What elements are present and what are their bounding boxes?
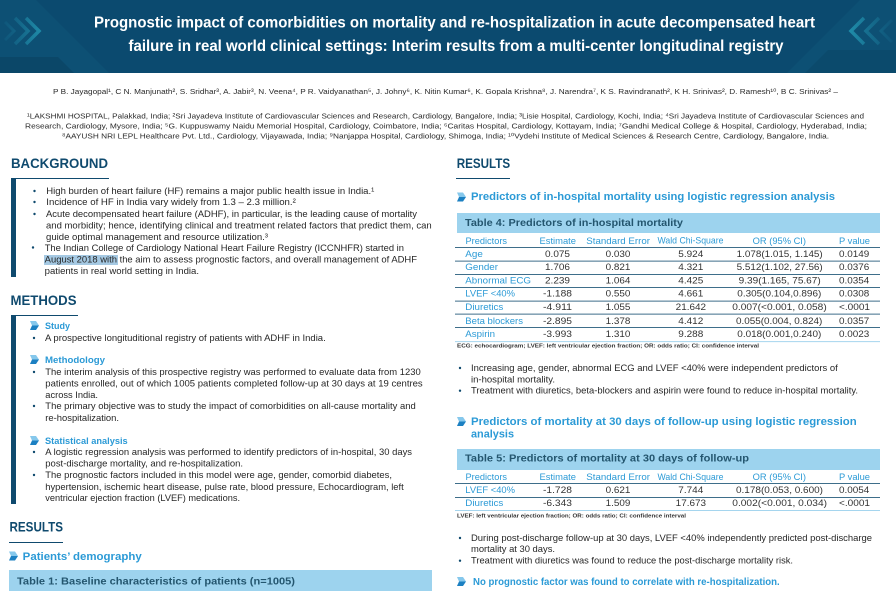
table 5: -6.343 <box>543 497 572 508</box>
authors: P B. Jayagopal¹, C N. Manjunath², S. Sridhar³, A. Jabir³, N. Veena⁴, P R. Vaidyanathan⁵, J. Johny⁶, K. Nitin Kumar⁶, K. Gopala Krishna⁸, J. Narendra⁷, K S. Ravindranath², K H. Srinivas², D. Ramesh¹⁰, B C. Srinivas² – <box>53 87 839 96</box>
table 4: 1.706 <box>545 261 570 272</box>
methodology text: The interim analysis of this prospective registry was performed to evaluate data from 1230 <box>45 366 421 377</box>
table 4: Beta blockers <box>465 316 523 326</box>
table 5: Table 5: Predictors of mortality at 30 days of follow-up <box>465 453 749 465</box>
icon: methodology arrow <box>30 355 39 364</box>
subheading: methodology: Methodology <box>45 355 106 366</box>
background bullets: High burden of heart failure (HF) remains a major public health issue in India.¹ <box>46 185 374 196</box>
panel: background <box>11 155 432 277</box>
table 4: 2.239 <box>545 275 570 286</box>
table 4: 0.0023 <box>839 328 869 339</box>
statistical analysis text: ventricular ejection fraction (LVEF) medications. <box>45 492 240 503</box>
background bullets: The Indian College of Cardiology National Heart Failure Registry (ICCNHFR) started in <box>45 242 404 253</box>
table 5: LVEF <40% <box>465 485 515 495</box>
icon: statistical analysis arrow <box>30 436 39 445</box>
table 4: 0.0357 <box>839 315 869 326</box>
highlight <box>44 255 118 265</box>
table 4: Diuretics <box>465 302 504 312</box>
table 5: <.0001 <box>839 497 870 508</box>
table 5: 0.002(<0.001, 0.034) <box>732 497 827 508</box>
subheading: study: Study <box>45 321 71 332</box>
table 4: 4.425 <box>678 275 703 286</box>
table 4: -2.895 <box>543 315 572 326</box>
affiliations: Research, Cardiology, Mysore, India; ⁵G. Kuppuswamy Naidu Memorial Hospital, Cardiology, Coimbatore, India; ⁶Caritas Hospital, Cardiology, Kottayam, India; ⁷Gandhi Medical College & Hospital, Cardiology, Hyderabad, India; <box>25 122 867 130</box>
table 4: 5.924 <box>678 248 703 259</box>
table 5 findings <box>459 532 872 566</box>
title: failure in real world clinical settings: Interim results from a multi-center longitudinal registry <box>128 38 784 55</box>
table 5: -1.728 <box>543 484 572 495</box>
table 5: Standard Error <box>586 472 650 482</box>
icon: re-hospitalization arrow <box>457 577 466 586</box>
table 4: 0.0354 <box>839 275 869 286</box>
table 5 <box>455 449 880 511</box>
table 4 findings: in-hospital mortality. <box>471 374 555 385</box>
table 5: 1.509 <box>606 497 630 508</box>
methodology text: across India. <box>45 389 98 400</box>
table 5: OR (95% CI) <box>753 472 806 482</box>
table 4: Predictors <box>466 236 507 246</box>
heading: results: RESULTS <box>10 519 63 535</box>
background bullets: patients in real world setting in India. <box>45 265 199 276</box>
subheading: 30-day predictors: Predictors of mortality at 30 days of follow-up using logistic regression <box>471 416 857 428</box>
title: Prognostic impact of comorbidities on mortality and re-hospitalization in acute decompensated heart <box>94 14 816 32</box>
table 4: 21.642 <box>676 301 706 312</box>
study text: A prospective longituditional registry of patients with ADHF in India. <box>45 332 326 343</box>
icon: demography arrow <box>9 552 18 560</box>
heading: methods: METHODS <box>10 292 76 308</box>
affiliations <box>25 112 867 140</box>
table 4: Estimate <box>540 236 576 246</box>
table 5: Predictors <box>466 472 507 482</box>
table 4: 0.0376 <box>839 261 869 272</box>
table 4 findings: Treatment with diuretics, beta-blockers and aspirin were found to reduce in-hospital mortality. <box>471 385 858 396</box>
table 4 findings <box>459 362 858 396</box>
statistical analysis text: hypertension, ischemic heart disease, pulse rate, blood pressure, Echocardiogram, left <box>45 481 404 492</box>
methodology text: re-hospitalization. <box>45 412 119 423</box>
table 4: 0.018(0.001,0.240) <box>737 328 821 339</box>
icon: in-hospital arrow <box>457 192 466 202</box>
table 5 findings: During post-discharge follow-up at 30 days, LVEF <40% independently predicted post-discharge <box>471 532 872 543</box>
table 5: Diuretics <box>465 498 504 508</box>
re-hospitalization statement: No prognostic factor was found to correlate with re-hospitalization. <box>473 577 780 588</box>
panel: results right <box>455 155 880 588</box>
affiliations: ⁸AAYUSH NRI LEPL Healthcare Pvt. Ltd., Cardiology, Vijayawada, India; ⁹Nanjappa Hospital, Cardiology, Shimoga, India; ¹⁰Vydehi Institute of Medical Sciences & Research Centre, Cardiology, Bangalore, India. <box>62 132 829 140</box>
table 4: 9.288 <box>678 328 703 339</box>
subheading: statistical analysis: Statistical analysis <box>45 436 128 447</box>
methodology text: patients enrolled, out of which 1005 patients completed follow-up at 30 days at 19 centres <box>45 378 423 389</box>
background bullets: guide optimal management and resource utilization.³ <box>46 231 268 242</box>
table 4: Gender <box>465 262 498 272</box>
statistical analysis text: The prognostic factors included in this model were age, gender, comorbid diabetes, <box>45 469 392 480</box>
table 4 <box>455 213 880 342</box>
subheading: 30-day predictors: analysis <box>471 429 514 441</box>
table 5: 17.673 <box>676 497 706 508</box>
table 4: 1.078(1.015, 1.145) <box>737 248 823 259</box>
table 4: LVEF <40% <box>465 289 515 299</box>
table 4: -3.993 <box>543 328 572 339</box>
statistical analysis text: post-discharge mortality, and re-hospitalization. <box>45 458 243 469</box>
table 5: 7.744 <box>678 484 703 495</box>
table 4: Abnormal ECG <box>465 276 531 286</box>
subheading: in-hospital predictors: Predictors of in-hospital mortality using logistic regression analysis <box>471 191 835 203</box>
table 4: 1.064 <box>606 275 630 286</box>
heading: background: BACKGROUND <box>11 155 108 171</box>
table 4: 0.821 <box>606 261 630 272</box>
table 5: 0.178(0.053, 0.600) <box>736 484 823 495</box>
table 5 findings: mortality at 30 days. <box>471 543 555 554</box>
statistical analysis text: A logistic regression analysis was performed to identify predictors of in-hospital, 30 days <box>45 446 412 457</box>
background bullets: Acute decompensated heart failure (ADHF), in particular, is the leading cause of mortality <box>46 208 417 219</box>
table 4: 4.321 <box>678 261 703 272</box>
table 4: 0.075 <box>545 248 570 259</box>
table 4: 0.055(0.004, 0.824) <box>736 315 822 326</box>
table 4: 4.661 <box>678 288 703 299</box>
table 4: 4.412 <box>678 315 703 326</box>
table 1 heading bar: Table 1: Baseline characteristics of patients (n=1005) <box>17 575 295 587</box>
subheading: 30-day predictors <box>471 416 857 441</box>
table 5: Wald Chi-Square <box>658 472 724 482</box>
table 5 findings: Treatment with diuretics was found to reduce the post-discharge mortality risk. <box>471 555 793 566</box>
title <box>94 14 816 55</box>
table 4: 9.39(1.165, 75.67) <box>739 275 821 286</box>
table 4: 0.0308 <box>839 288 869 299</box>
icon: 30-day arrow <box>457 417 466 426</box>
affiliations: ¹LAKSHMI HOSPITAL, Palakkad, India; ²Sri Jayadeva Institute of Cardiovascular Sciences and Research, Cardiology, Bangalore, India; ³Lisie Hospital, Cardiology, Kochi, India; ⁴Sri Jayadeva Institute of Cardiovascular Sciences and <box>27 112 864 120</box>
table 4: Standard Error <box>586 236 650 246</box>
table 4: P value <box>839 236 870 246</box>
table 4: Age <box>465 249 483 259</box>
table 4: Table 4: Predictors of in-hospital mortality <box>465 217 683 229</box>
table 4: -1.188 <box>543 288 572 299</box>
header banner <box>0 0 896 73</box>
table 4: 1.055 <box>606 301 630 312</box>
table 4: 0.030 <box>606 248 630 259</box>
table 5: P value <box>839 472 870 482</box>
icon: study arrow <box>30 321 39 330</box>
table 5: 0.621 <box>606 484 630 495</box>
table 4: 0.550 <box>606 288 630 299</box>
statistical analysis text <box>33 446 412 503</box>
heading: results: RESULTS <box>457 155 510 171</box>
table 4: 0.0149 <box>839 248 869 259</box>
table 5 footnote: LVEF: left ventricular ejection fraction; OR: odds ratio; CI: confidence interval <box>457 514 687 520</box>
table 4: 0.305(0.104,0.896) <box>737 288 821 299</box>
methodology text <box>33 366 423 423</box>
table 5: 0.0054 <box>839 484 869 495</box>
background bullets: August 2018 with the aim to assess prognostic factors, and overall management of ADHF <box>45 254 417 265</box>
background bullets: and morbidity; hence, identifying clinical and treatment related factors that predict them, can <box>46 219 432 230</box>
background bullets: Incidence of HF in India vary widely from 1.3 – 2.3 million.² <box>46 196 296 207</box>
table 4: 1.378 <box>606 315 630 326</box>
table 4 footnote: ECG: echocardiogram; LVEF: left ventricular ejection fraction; OR: odds ratio; CI: confidence interval <box>457 344 760 350</box>
panel: results left <box>9 519 432 591</box>
table 4: OR (95% CI) <box>753 236 806 246</box>
panel: methods <box>10 292 423 504</box>
subheading: patients demography: Patients’ demography <box>23 551 143 563</box>
table 4: 5.512(1.102, 27.56) <box>737 261 823 272</box>
table 4: Aspirin <box>465 329 495 339</box>
table 4: -4.911 <box>543 301 572 312</box>
table 4 findings: Increasing age, gender, abnormal ECG and LVEF <40% were independent predictors of <box>471 362 838 373</box>
table 4: Wald Chi-Square <box>658 236 724 246</box>
table 5: Estimate <box>540 472 576 482</box>
table 4: 0.007(<0.001, 0.058) <box>732 301 827 312</box>
methodology text: The primary objective was to study the impact of comorbidities on all-cause mortality and <box>45 400 416 411</box>
background bullets <box>32 185 432 276</box>
table 4: 1.310 <box>606 328 630 339</box>
table 1 heading bar <box>9 570 432 591</box>
table 4: <.0001 <box>839 301 870 312</box>
